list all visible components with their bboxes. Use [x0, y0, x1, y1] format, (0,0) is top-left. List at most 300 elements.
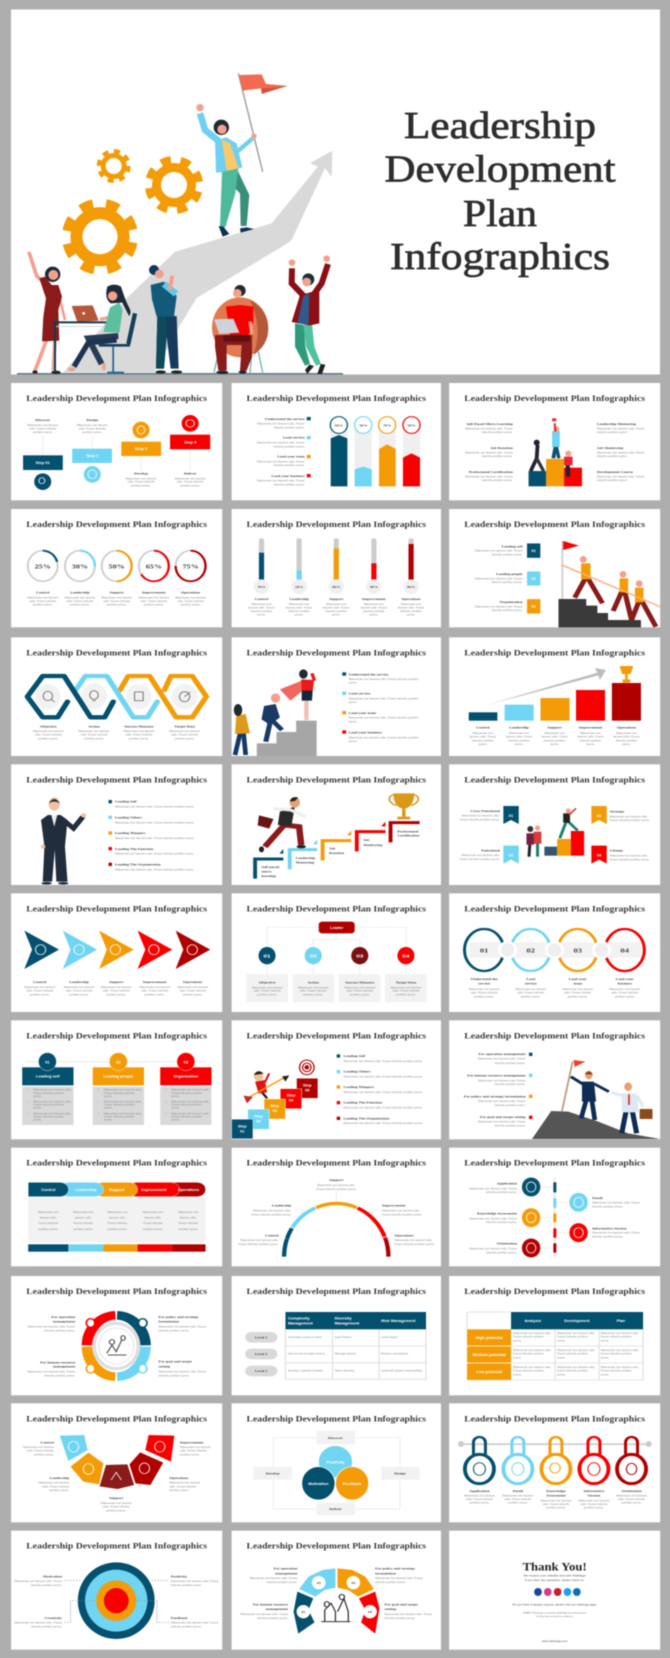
- thermometer body text: purus.: [407, 613, 416, 617]
- panel: growth bars: [449, 637, 660, 756]
- labels: Leading self: [502, 545, 523, 548]
- icon: medium gear: [143, 154, 205, 216]
- thermometer bulbs: [254, 579, 419, 594]
- illustration: stairs: [257, 721, 317, 756]
- table cells: purus.: [601, 1356, 610, 1359]
- header text: Management: [288, 1322, 314, 1326]
- ring tracks: [28, 551, 206, 581]
- step labels: Step: [303, 1084, 312, 1087]
- bulb values: 70%: [257, 585, 266, 589]
- badge numbers: 03: [351, 1581, 356, 1585]
- column bullets: Fusce lobortis porttitor: [171, 1115, 202, 1119]
- right labels: [597, 422, 636, 474]
- ring labels: Leadership: [70, 591, 90, 595]
- arrow icons: [35, 945, 197, 955]
- percent labels: 90%: [335, 424, 343, 427]
- tab labels: Improvement: [141, 1188, 167, 1192]
- box body text: odio. Fusce lobortis: [300, 989, 327, 993]
- right body text: Fusce lobortis porttitor purus.: [610, 858, 650, 861]
- illustration: flag: [561, 541, 579, 599]
- legend body text: Maecenas non laoreet odio. Fusce: [478, 1099, 526, 1103]
- icon: trophy: [389, 793, 418, 819]
- legend body text: Maecenas non laoreet odio. Fusce lobortis porttitor purus.: [344, 1090, 423, 1094]
- thermometer body text: laoreet odio. Fusce: [286, 606, 313, 609]
- thermometer body text: purus.: [332, 613, 341, 617]
- legend body text: Maecenas non laoreet odio. Fusce: [257, 441, 305, 445]
- panel: businessman list: [11, 764, 222, 885]
- column bullets: Fusce lobortis porttitor: [171, 1091, 202, 1095]
- column bullets: Fusce lobortis porttitor: [33, 1091, 64, 1095]
- ring body text: Maecenas non laoreet: [138, 596, 169, 600]
- body: develop: Maecenas non laoreet: [126, 477, 157, 480]
- bar body text: Maecenas non: [616, 731, 637, 735]
- spine segments: [553, 1182, 556, 1253]
- legend body text: Maecenas non laoreet odio. Fusce lobortis porttitor: [349, 697, 419, 700]
- label body text: Maecenas non laoreet odio. Fusce: [475, 549, 523, 553]
- box body text: porttitor purus.: [303, 993, 323, 996]
- left labels: [40, 1315, 76, 1369]
- step chart: [544, 831, 584, 856]
- arrow body text: Maecenas non laoreet: [24, 985, 55, 989]
- box body text: porttitor purus.: [350, 993, 370, 996]
- legend headings: [464, 1052, 526, 1119]
- step labels: Step: [238, 1125, 248, 1129]
- tab headers: [28, 1182, 206, 1197]
- tile numbers: 02: [531, 577, 536, 581]
- table cells: purus.: [513, 1373, 522, 1376]
- legend headings: Lead your team: [349, 711, 376, 715]
- thermometer body text: purus.: [257, 613, 266, 617]
- bar body text: purus.: [515, 742, 524, 746]
- legend body text: purus.: [349, 681, 358, 685]
- left body text: [469, 1187, 518, 1254]
- ring numbers: [480, 946, 629, 954]
- lock labels: Informative: [584, 1489, 605, 1493]
- arc body text: [238, 1183, 435, 1246]
- bar tracks: [331, 425, 420, 486]
- thermometer labels: Operations: [401, 597, 421, 601]
- hexagon body text: odio. Fusce lobortis: [35, 733, 62, 737]
- table cells: Lead with global responsibility: [381, 1369, 423, 1372]
- box body text: [252, 986, 422, 996]
- column bullets: Maecenas non laoreet odio.: [33, 1088, 72, 1092]
- column bullets: •: [98, 1088, 99, 1092]
- request line: Do you have a design request, please visit our slideegg page.: [512, 1603, 597, 1606]
- lock body text: [464, 1494, 647, 1510]
- ring body text: odio. Fusce lobortis: [177, 599, 205, 603]
- thermometer body text: laoreet odio. Fusce: [361, 606, 388, 609]
- block body text: [23, 1445, 211, 1512]
- text: deliver: Deliver: [184, 472, 197, 475]
- step labels: 02: [256, 1120, 261, 1123]
- header text: Diversity: [335, 1317, 352, 1320]
- legend body text: Maecenas non laoreet odio. Fusce lobortis porttitor purus.: [344, 1121, 423, 1125]
- panel: thermometers: [232, 509, 441, 627]
- legend headings: Leading Mangers: [115, 831, 146, 835]
- tab labels: Leadership: [75, 1188, 98, 1192]
- step labels: 01: [240, 1130, 245, 1134]
- step labels: Step 2: [86, 454, 98, 458]
- credits: Let the idea to lead the audience: [536, 1615, 574, 1618]
- table cells: Fusce lobortis porttitor: [601, 1352, 632, 1356]
- ring body text: odio. Fusce lobortis: [140, 599, 168, 603]
- circle numbers: 03: [356, 954, 363, 959]
- slide title: Leadership Development Plan Infographics: [464, 520, 645, 530]
- ring body text: [27, 596, 206, 607]
- content area: [28, 1197, 206, 1242]
- slide title: Leadership Development Plan Infographics: [26, 1414, 207, 1424]
- thermometer body text: lobortis porttitor: [288, 609, 310, 613]
- column bullets: purus.: [104, 1118, 113, 1122]
- block body text: odio. Fusce lobortis: [180, 1449, 207, 1453]
- left body text: [465, 427, 513, 482]
- right body text: Maecenas non laoreet odio. Fusce: [597, 451, 645, 454]
- hexagon body text: porttitor purus.: [175, 737, 195, 740]
- illustration: man climbing: [262, 693, 282, 742]
- lock body text: odio. Fusce lobortis: [618, 1497, 646, 1501]
- step labels: Job: [363, 838, 370, 842]
- body: discover: odio. Fusce lobortis: [29, 427, 57, 430]
- block body text: odio. Fusce lobortis: [169, 1485, 197, 1488]
- illustration: businessman: [41, 797, 86, 885]
- left labels: Improvement: [180, 1441, 204, 1444]
- panel: bullseye: [11, 1531, 222, 1650]
- panel: level table: [232, 1276, 441, 1395]
- ring body text: [469, 987, 640, 998]
- ring percentages: 65%: [146, 563, 162, 570]
- panel: spine with circles: [449, 1148, 660, 1266]
- legend headings: Leading Mangers: [344, 1085, 375, 1089]
- left labels: Support: [109, 1496, 124, 1500]
- table cells: [513, 1331, 639, 1376]
- column bullets: Maecenas non laoreet odio.: [171, 1088, 210, 1092]
- center icon: [321, 1594, 350, 1622]
- left body text: Maecenas non laoreet odio. Fusce: [28, 1325, 76, 1328]
- right body text: [159, 1325, 207, 1377]
- ground line: [17, 373, 343, 375]
- arc body text: Maecenas non laoreet odio.: [253, 1209, 292, 1212]
- right body text: Maecenas non laoreet odio.: [610, 854, 648, 858]
- ring labels: business: [618, 982, 633, 985]
- ring body text: Maecenas non laoreet: [469, 987, 500, 991]
- panel: stepped process: [11, 383, 222, 500]
- right labels: Change: [610, 849, 623, 853]
- table cells: Maecenas non laoreet odio.: [513, 1348, 552, 1352]
- table cells: purus.: [513, 1339, 522, 1342]
- column bullets: purus.: [171, 1118, 180, 1122]
- left labels: [466, 422, 513, 474]
- lock bodies: [465, 1454, 646, 1484]
- left labels: Self Paced Micro Learning: [466, 422, 513, 426]
- left body text: lobortis porttitor purus.: [486, 1220, 517, 1224]
- column bullets: Fusce lobortis porttitor: [33, 1103, 64, 1107]
- left body text: Maecenas non laoreet odio. Fusce: [469, 1247, 518, 1251]
- quadrant badges: [86, 1319, 147, 1373]
- left body text: [28, 1325, 76, 1377]
- left body text: Maecenas non laoreet odio. Fusce: [250, 1576, 298, 1580]
- title: cover heading: Infographics: [390, 236, 610, 278]
- right body text: lobortis porttitor purus.: [592, 1235, 623, 1239]
- bar body text: purus.: [550, 742, 559, 746]
- slide title: Leadership Development Plan Infographics: [247, 1542, 426, 1551]
- column body text: porttitor purus.: [108, 1227, 128, 1231]
- thermometer labels: Leadership: [289, 597, 309, 601]
- lock icons: [473, 1463, 637, 1475]
- panel: arrow chevrons: [11, 893, 222, 1012]
- leader box: [319, 922, 355, 933]
- labels: Organization: [500, 600, 523, 604]
- legend headings: [344, 1054, 389, 1120]
- table cells: Fusce lobortis porttitor: [601, 1335, 632, 1339]
- arrow body text: Maecenas non laoreet: [139, 985, 170, 989]
- title: cover heading: [384, 105, 616, 278]
- column body text: Fusce lobortis: [143, 1221, 163, 1225]
- panel: progress rings: [11, 509, 222, 627]
- bulb values: 20%: [295, 585, 304, 589]
- right body text: Maecenas non laoreet odio. Fusce: [171, 1621, 219, 1625]
- ring numbers: 02: [526, 946, 535, 954]
- left body text: lobortis porttitor purus.: [482, 478, 513, 482]
- slide rows 3 and 4: [11, 637, 660, 885]
- slide rows 5 and 6: [11, 893, 660, 1139]
- label body text: Maecenas non laoreet odio. Fusce: [475, 605, 523, 608]
- lock body text: porttitor purus.: [546, 1506, 566, 1510]
- circle numbers: 02: [310, 954, 317, 959]
- body: develop: porttitor purus.: [131, 484, 151, 487]
- ring labels: Operations: [181, 591, 201, 595]
- table cells: Fusce lobortis porttitor: [513, 1352, 544, 1356]
- thermometer body text: lobortis porttitor: [251, 609, 272, 613]
- left labels: management: [266, 1607, 289, 1611]
- block body text: Maecenas non laoreet: [23, 1445, 54, 1449]
- column bullets: purus.: [104, 1094, 113, 1098]
- bulb values: 40%: [370, 585, 378, 589]
- circle numbers: 02: [116, 1061, 121, 1064]
- right labels: Strategy: [610, 810, 625, 813]
- ring body text: porttitor purus.: [33, 603, 53, 607]
- ring body text: porttitor purus.: [181, 603, 201, 607]
- hexagon labels: Objective: [40, 725, 57, 728]
- info boxes: [247, 974, 426, 1002]
- arc body text: Fusce lobortis porttitor purus.: [316, 1187, 357, 1191]
- illustration: woman waiting: [234, 704, 250, 755]
- ring numbers: 01: [480, 946, 489, 954]
- left body text: [14, 1579, 62, 1629]
- legend headings: [265, 417, 305, 478]
- thermometer tubes: [259, 538, 414, 582]
- tile numbers: 01: [531, 549, 536, 553]
- left body text: Maecenas non laoreet odio. Fusce: [465, 451, 513, 454]
- box body text: odio. Fusce lobortis: [346, 989, 374, 993]
- column bullets: Fusce lobortis porttitor: [33, 1115, 64, 1119]
- body: deliver: odio. Fusce lobortis: [177, 480, 204, 484]
- bar body text: lobortis porttitor: [508, 739, 530, 742]
- column headers: [22, 1067, 212, 1085]
- legend headings: Lead service: [349, 692, 371, 696]
- panel: semicircle arc: [232, 1148, 441, 1266]
- slide title: Leadership Development Plan Infographics: [247, 1414, 426, 1424]
- thermometer body text: purus.: [295, 613, 304, 617]
- table cells: Fusce lobortis porttitor: [513, 1369, 544, 1373]
- ring body text: Maecenas non laoreet: [27, 596, 58, 600]
- left body text: Maecenas non laoreet odio. Fusce: [28, 1370, 76, 1373]
- bar body text: [470, 731, 640, 746]
- arc labels: [265, 1178, 414, 1237]
- header text: Leading people: [104, 1075, 133, 1079]
- left labels: Knowledge Assessment: [477, 1212, 518, 1215]
- right body text: Maecenas non laoreet odio. Fusce: [375, 1576, 423, 1580]
- legend body text: Maecenas non laoreet odio. Fusce lobortis porttitor purus.: [344, 1106, 423, 1110]
- left body text: [240, 1576, 298, 1620]
- legend body text: Maecenas non laoreet odio. Fusce lobortis porttitor purus.: [115, 836, 194, 840]
- box body text: odio. Fusce lobortis: [392, 989, 420, 993]
- block body text: Maecenas non laoreet: [39, 1481, 69, 1485]
- thermometer body text: purus.: [370, 613, 378, 617]
- table cells: Fusce lobortis porttitor: [601, 1369, 632, 1373]
- tab labels: Support: [109, 1188, 125, 1192]
- thermometer labels: [255, 597, 421, 601]
- slide title: Leadership Development Plan Infographics: [26, 904, 207, 914]
- label body text: [475, 549, 523, 612]
- arrow body text: odio. Fusce lobortis: [179, 989, 207, 993]
- box labels: Action: [307, 981, 319, 985]
- thank you message: [524, 1574, 586, 1582]
- legend body text: Maecenas non laoreet odio. Fusce: [478, 1079, 526, 1082]
- ring labels: [471, 977, 634, 985]
- legend headings: For policy and strategy formulation: [464, 1095, 526, 1098]
- hexagon body text: Maecenas non laoreet: [169, 729, 200, 733]
- step labels: Step: [270, 1104, 280, 1108]
- right body text: lobortis porttitor purus.: [171, 1583, 202, 1587]
- bar values: [331, 435, 420, 486]
- hexagon icons: [43, 691, 190, 702]
- table cells: Maecenas non laoreet odio.: [513, 1365, 552, 1369]
- right labels: [159, 1315, 199, 1369]
- left labels: [253, 1567, 298, 1611]
- bar body text: purus.: [622, 742, 631, 746]
- text: design: Design: [86, 418, 98, 422]
- hexagon body text: Maecenas non laoreet: [33, 729, 64, 733]
- lock labels: Knowledge: [546, 1489, 566, 1493]
- step blocks: [232, 1078, 318, 1139]
- column bullets: purus.: [33, 1106, 42, 1110]
- table cells: Maecenas non laoreet odio.: [601, 1365, 639, 1369]
- labels: [496, 545, 523, 604]
- table cells: Lead Target: [381, 1335, 398, 1339]
- slide title: Leadership Development Plan Infographics: [247, 1159, 426, 1168]
- ring labels: [36, 591, 201, 595]
- bar body text: Maecenas non: [544, 731, 565, 735]
- step labels: Leadership: [296, 856, 315, 860]
- column bullets: Maecenas non laoreet odio.: [33, 1100, 72, 1103]
- column body text: laoreet odio.: [40, 1216, 57, 1219]
- hexagon labels: Target Data: [174, 725, 195, 728]
- left body text: lobortis porttitor purus.: [486, 1190, 517, 1194]
- bar body text: lobortis porttitor: [616, 739, 637, 742]
- bullseye rings: [78, 1562, 155, 1639]
- step labels: Shadowing: [363, 843, 383, 847]
- growth arrow: [63, 151, 332, 372]
- table cells: Hire for the broader picture: [288, 1352, 326, 1356]
- legend headings: Understand the service: [349, 673, 389, 676]
- bars: [469, 683, 641, 721]
- bar body text: Maecenas non: [473, 731, 494, 735]
- right labels: Informative Session: [592, 1227, 626, 1230]
- label body text: Maecenas non laoreet odio. Fusce: [475, 577, 523, 580]
- bar body text: Maecenas non: [509, 731, 530, 735]
- credits: SMART: Meetings created by SlideEgg for presentations: [523, 1612, 587, 1614]
- stage labels: Design: [394, 1472, 406, 1476]
- ring values: [28, 551, 206, 581]
- left body text: Maecenas non laoreet odio.: [462, 853, 500, 857]
- ring body text: porttitor purus.: [521, 995, 541, 998]
- slide title: Leadership Development Plan Infographics: [464, 904, 645, 914]
- slide title: Leadership Development Plan Infographics: [464, 394, 645, 404]
- arrow body text: porttitor purus.: [106, 993, 126, 996]
- ring body text: odio. Fusce lobortis: [29, 599, 57, 603]
- left labels: Control: [40, 1441, 54, 1444]
- table cells: [288, 1335, 423, 1372]
- quadrant arcs: [87, 1315, 145, 1377]
- legend body text: [478, 1057, 526, 1128]
- left labels: management: [53, 1320, 76, 1324]
- step labels: [36, 441, 196, 465]
- lock body text: Maecenas non laoreet: [541, 1499, 572, 1502]
- illustration: leader in suit: [571, 1071, 609, 1120]
- left labels: Job Rotation: [490, 446, 513, 450]
- block body text: porttitor purus.: [34, 1453, 54, 1456]
- panel: summit handshake: [449, 1020, 660, 1139]
- bar body text: lobortis porttitor: [472, 739, 494, 742]
- number ribbons: [503, 806, 607, 864]
- arrow body text: porttitor purus.: [145, 993, 165, 996]
- step accents: [279, 822, 385, 854]
- lock body text: Maecenas non laoreet: [503, 1494, 533, 1498]
- legend body text: purus.: [349, 700, 358, 704]
- lock body text: odio. Fusce lobortis: [580, 1502, 608, 1506]
- arrow body text: Maecenas non laoreet: [64, 985, 95, 989]
- panel: linked rings: [449, 893, 660, 1012]
- column bullets: Maecenas non laoreet odio.: [171, 1112, 210, 1115]
- circle numbers: 03: [184, 1061, 188, 1064]
- column bullets: Maecenas non laoreet odio.: [104, 1088, 142, 1092]
- ring labels: Support: [110, 591, 125, 595]
- column bullets: purus.: [33, 1094, 42, 1098]
- illustration: running businessman: [258, 797, 306, 852]
- table cells: Maecenas non laoreet odio.: [557, 1365, 596, 1369]
- lock labels: Application: [469, 1489, 490, 1493]
- header text: Complexity: [288, 1317, 310, 1320]
- hexagon body text: [33, 729, 200, 740]
- row header text: [473, 1336, 506, 1374]
- ring labels: service: [525, 982, 537, 985]
- pill labels: Level 1: [255, 1336, 268, 1339]
- slide title: Leadership Development Plan Infographics: [247, 1287, 426, 1297]
- right labels: For policy and strategy: [159, 1315, 199, 1319]
- ring body text: porttitor purus.: [144, 603, 164, 607]
- slide title: Leadership Development Plan Infographics: [26, 1287, 207, 1297]
- thermometer body text: laoreet odio. Fusce: [398, 606, 425, 609]
- legend body text: [344, 1059, 423, 1125]
- step labels: Step 4: [184, 441, 196, 444]
- column body text: Maecenas non: [38, 1210, 59, 1214]
- bulb values: [257, 585, 416, 589]
- box body text: porttitor purus.: [396, 993, 416, 996]
- table cells: Fusce lobortis porttitor: [557, 1352, 588, 1356]
- column body text: Maecenas non: [107, 1210, 128, 1214]
- ring outlines: [464, 929, 644, 971]
- body: design: porttitor purus.: [82, 430, 103, 434]
